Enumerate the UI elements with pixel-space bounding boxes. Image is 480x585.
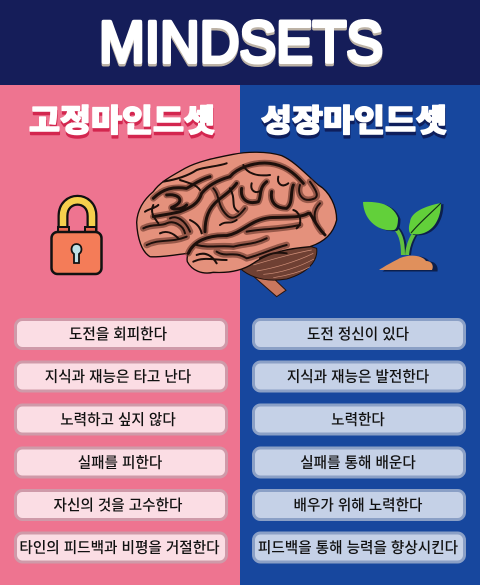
icon: padlock bbox=[52, 200, 102, 274]
item: 도전 정신이 있다 bbox=[307, 326, 410, 343]
item bbox=[16, 362, 226, 391]
sprout left leaf bbox=[366, 203, 400, 231]
heading: fixed mindset: 고정마인드셋 bbox=[30, 107, 216, 142]
item bbox=[16, 533, 226, 562]
title: MINDSETS bbox=[99, 12, 383, 78]
padlock body bbox=[52, 232, 102, 274]
heading: growth mindset: 성장마인드셋 bbox=[262, 107, 448, 142]
item: 지식과 재능은 타고 난다 bbox=[45, 368, 192, 386]
item bbox=[254, 490, 464, 520]
sprout right leaf bbox=[411, 204, 444, 235]
item: 지식과 재능은 발전한다 bbox=[287, 368, 430, 386]
soil mound bbox=[382, 256, 438, 272]
heading: growth mindset: 성장마인드셋 bbox=[261, 104, 447, 138]
item: 타인의 피드백과 비평을 거절한다 bbox=[19, 540, 220, 556]
item: 자신의 것을 고수한다 bbox=[54, 497, 183, 514]
cerebellum bbox=[240, 245, 317, 280]
item bbox=[16, 405, 226, 434]
item bbox=[254, 405, 464, 434]
item: 노력한다 bbox=[331, 412, 385, 428]
heading: fixed mindset: 고정마인드셋 bbox=[29, 104, 215, 138]
item: 실패를 피한다 bbox=[78, 454, 163, 472]
item bbox=[254, 533, 464, 562]
padlock feet bbox=[58, 227, 69, 236]
item: 피드백을 통해 능력을 향상시킨다 bbox=[258, 540, 459, 556]
title: MINDSETS bbox=[99, 10, 383, 75]
item: 실패를 통해 배운다 bbox=[300, 454, 416, 472]
item: 노력하고 싶지 않다 bbox=[60, 412, 176, 428]
panel: growth mindset list bbox=[254, 320, 464, 562]
cerebrum bbox=[137, 152, 337, 273]
icon: brain bbox=[137, 152, 337, 297]
item: 도전을 회피한다 bbox=[69, 326, 168, 343]
item bbox=[254, 448, 464, 477]
brain stem bbox=[250, 273, 286, 297]
brain fold shading bbox=[143, 163, 322, 258]
panel: growth mindset background bbox=[240, 85, 480, 585]
item bbox=[16, 320, 226, 348]
item bbox=[254, 362, 464, 391]
panel: fixed mindset background bbox=[0, 85, 240, 585]
panel: title banner bbox=[0, 0, 480, 85]
brain folds bbox=[143, 163, 325, 263]
padlock keyhole bbox=[72, 244, 81, 263]
panel: fixed mindset list bbox=[16, 320, 226, 562]
item bbox=[16, 448, 226, 477]
sprout stems bbox=[395, 226, 420, 255]
icon: sprout bbox=[363, 202, 444, 272]
item: 배우가 위해 노력한다 bbox=[294, 497, 423, 514]
item bbox=[254, 320, 464, 348]
padlock shackle bbox=[63, 200, 92, 233]
item bbox=[16, 490, 226, 520]
